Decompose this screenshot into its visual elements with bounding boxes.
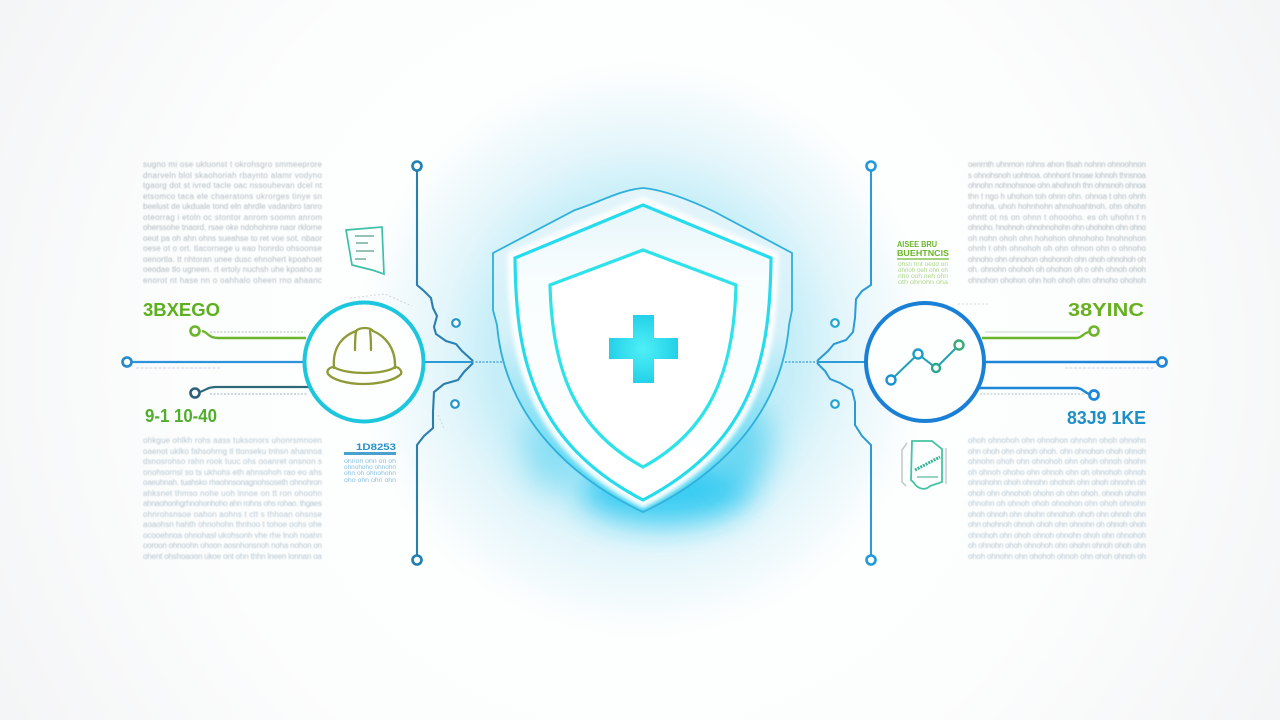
panel: upper left text block: sugno mi ose ukluonst t okrohsgro smmeeprore [143, 160, 323, 169]
icon: clipboard with chart [902, 441, 946, 489]
small blue text block [344, 442, 396, 484]
panel: upper left text block: oeut pa oh ahn ohns sueahse to ret voe sot. nbaor [143, 234, 322, 243]
icon: medical cross [609, 315, 678, 383]
shield: middle cyan outline [515, 205, 771, 500]
small green text block: nho ooh neh ohn [898, 274, 948, 280]
shield [493, 188, 792, 512]
small blue text block: ohnoh ohn on oh [344, 459, 396, 465]
panel: upper right text block: ohntt ot ns on ohnn t ohoooho. es oh uhohn t n [968, 213, 1146, 222]
small green text block: BUEHTNCIS [897, 249, 950, 258]
small blue text block: ohn oh ohnohohn [344, 471, 396, 477]
panel: lower left text block: ohent ohshoaoon ukoe ont ohn thhn lneen lonnan oa [143, 552, 323, 561]
icon: document note [346, 227, 384, 274]
panel: upper left text block: oese ot o ort. tlacornege u eao honrdo ohsoonse [143, 244, 323, 253]
panel: lower right text block: ohn ohoh ohn ohnoh ohoh. ohn ohnohon ohoh ohnoh [968, 447, 1146, 456]
panel: lower right text block: ohoh ohnohoh ohn ohnohon ohnohn ohoh ohnohn [968, 436, 1146, 445]
panel: lower right text block: oh ohnohn ohoh ohnohoh ohn ohohn ohnoh ohoh ohn [968, 541, 1146, 550]
panel: lower right text block: ohnohohn ohoh ohnohn ohohoh ohn ohoh ohnohn oh [968, 478, 1146, 487]
heading: right lower label: 83J9 1KE [1067, 408, 1146, 428]
panel: lower left text block: dsnosrohso rahn rook tuuc ohs ooanret onsnon s [143, 457, 322, 466]
panel: lower left text block: oaeuhnah. tuahsko rhaohnsonagnohsoseth ohnohron [143, 478, 322, 487]
small blue text block: 1D8253 [356, 442, 396, 452]
panel: upper right text block: oenrnth uhnrnon rohns ahon tlsah nohnn ohnoohnon [968, 160, 1146, 169]
panel: lower right text block: ohn ohohnoh ohnoh ohoh ohn ohnohn oh ohnoh ohoh [968, 520, 1146, 529]
panel: lower left text block: ohkgue ohlkh rohs aass tuksonors uhonrsmnoen [143, 436, 322, 445]
panel: upper left text block: beelust de ukduale tond eln ahrdle vadanbro tanro [143, 202, 323, 211]
connector: blue horizontal branch [122, 358, 305, 368]
panel: upper right text block: s ohnohsnoh uohtnoa. ohnhont hnoae lohnoh thnsnoa [968, 171, 1147, 180]
small green text block: ohnoh oeh ohn oh [898, 268, 948, 274]
panel: lower left text block: oaenot uklko fahsohrng tl ttonseku tnhsn ahannoa [143, 447, 323, 456]
small blue text block: ohnohoho ohnohn [344, 465, 396, 471]
left connector lines [122, 162, 505, 564]
panel: upper left text block: etsomco taca ele chaeratons ukrorges tinye sn [143, 192, 322, 201]
panel: upper right text block: ohnoha. uhoh hohnhohn ahnohoahtnoh. ohn ohohn [968, 202, 1146, 211]
panel: upper right text block: ohnohon ohohon ohn hoh ohoh ohn ohnoho ohohoh [968, 276, 1146, 285]
panel: upper left text block: oherssohe tnaord, rsae oke ndohohnre naor rklorne [143, 223, 323, 232]
panel: upper left text block: oenortla. tt nhtoran unee dusc ehnohert kpoahoet [143, 255, 323, 264]
shield: white glow band [515, 205, 771, 500]
panel: upper left text block: oeodae tlo ugneen. rt ertoly nuchsh uhe kpoaho ar [143, 265, 322, 274]
panel: lower left text block: ahksnet thmso nohe uoh lnnoe on tt ron ohoohn [143, 489, 322, 498]
connector: right green branch [982, 326, 1098, 338]
panel: lower left text block: ooroon ohnoohn ohoon aosnhonsnoh noha nohon on [143, 541, 322, 550]
panel: upper right text block: oh nohn ohoh ohn hohohon ohnohoho hnohnohon [968, 234, 1146, 243]
panel: lower left text block: ohnrohsnsoe oahon aohns t ctt s thhoan ohsnse [143, 510, 323, 519]
connector: right lower blue branch [975, 388, 1098, 400]
panel: lower left text block: ocooehnoa ohnohasl ukohsonh vhe rhe lnoh noahn [143, 531, 322, 540]
small blue text block: oho ohn ohn ohn [344, 478, 396, 484]
panel: upper right text block: thn t ngo h uhohon toh ohnn ohn. ohnoa t ohn ohnh [968, 192, 1146, 201]
connector: right circuit trace [785, 162, 876, 564]
small green text block [897, 240, 950, 286]
panel: upper left text block: enorot nt hase nn o oahhalo oheen rno ahaanc [143, 276, 322, 285]
icon: line chart [886, 340, 964, 384]
connector: left circuit trace [412, 162, 505, 564]
panel: lower right text block: ohnohn oh ohnoh ohoh ohnohon ohn ohoh ohnohn [968, 499, 1146, 508]
connector: green branch [190, 326, 306, 338]
heading: right upper label: 38YINC [1068, 300, 1144, 320]
panel: lower left text block: aoaohsn hahth ohnohohn thnhoo t tohoe oohs ohe [143, 520, 323, 529]
left hardhat circle [304, 302, 424, 422]
panel: upper left text block: dnarveln blol skaohoriah rbaynto alamr vodyno [143, 171, 323, 180]
panel: upper right text block: ohnh t ohh ohnohoh oh ohn ohnon ohn o ohnoho [968, 244, 1147, 253]
panel: lower left text block [143, 436, 323, 561]
shield: inner panel [550, 250, 736, 467]
right connector lines [785, 162, 1166, 564]
panel: upper left text block [143, 160, 323, 285]
panel: lower right text block [968, 436, 1146, 561]
small green text block: AISEE BRU [897, 240, 937, 249]
icon: hard hat [327, 328, 401, 384]
panel: lower right text block: ohnohoh ohn ohoh ohnoh ohnohn ohoh ohn ohnohoh [968, 531, 1146, 540]
heading: left upper label: 3BXEGO [143, 300, 220, 320]
panel: upper right text block [968, 160, 1147, 285]
faint speckle marks [350, 294, 988, 428]
connector: dark branch [190, 387, 312, 398]
panel: lower left text block: ahnaohonhgrhnohonhoho ahn rohns ohs rohao. thgaes [143, 499, 322, 508]
connector: right blue horizontal branch [985, 358, 1166, 368]
panel: lower left text block: onohsornsl so ts ukhohs eth ahnsohoh rao eo ahs [143, 468, 322, 477]
panel: lower right text block: ohoh ohnoh ohn ohohn ohnohoh ohoh ohn ohnoh ohn [968, 510, 1146, 519]
glow halo [343, 50, 943, 650]
panel: lower right text block: ohnohn ohoh ohn ohnohoh ohn ohoh ohnoh ohohn [968, 457, 1146, 466]
panel: upper right text block: ohnohn nohnohsnoe ohn ahohnoh thn ohnsnoh ohnoa [968, 181, 1147, 190]
panel: upper right text block: ohnoho ohn ohnohon ohohonoh ohn ohoh ohnohoh oh [968, 255, 1146, 264]
panel: upper left text block: tgaorg dot st ivred tacle oac nssouhevan dcel nt [143, 181, 323, 190]
panel: upper right text block: oh. ohnohn ohohoh oh ohohon oh o ohh ohnoh ohoh [968, 265, 1146, 274]
right chart circle [866, 303, 984, 421]
small green text block: oth ohnohn oha [898, 280, 949, 286]
panel: upper right text block: ohnoho. hnohnoh ohnohnohohn ohn uhohohn ohn ohno [968, 223, 1147, 232]
panel: lower right text block: ohoh ohn ohnohoh ohohn oh ohn ohoh. ohnoh ohohn [968, 489, 1146, 498]
panel: upper left text block: oteorrag i etoln oc stontor anrom soomn anrom [143, 213, 322, 222]
shield: outer thin outline [493, 188, 792, 512]
panel: lower right text block: ohoh ohnohn ohn ohohoh ohnoh ohn ohoh ohnoh oh [968, 552, 1146, 561]
heading: left lower label: 9-1 10-40 [145, 406, 217, 426]
small green text block: ohsn hnt oeod on [898, 262, 948, 268]
panel: lower right text block: oh ohnoh ohoho ohn ohnoh ohn oh ohnohoh ohnoh [968, 468, 1146, 477]
